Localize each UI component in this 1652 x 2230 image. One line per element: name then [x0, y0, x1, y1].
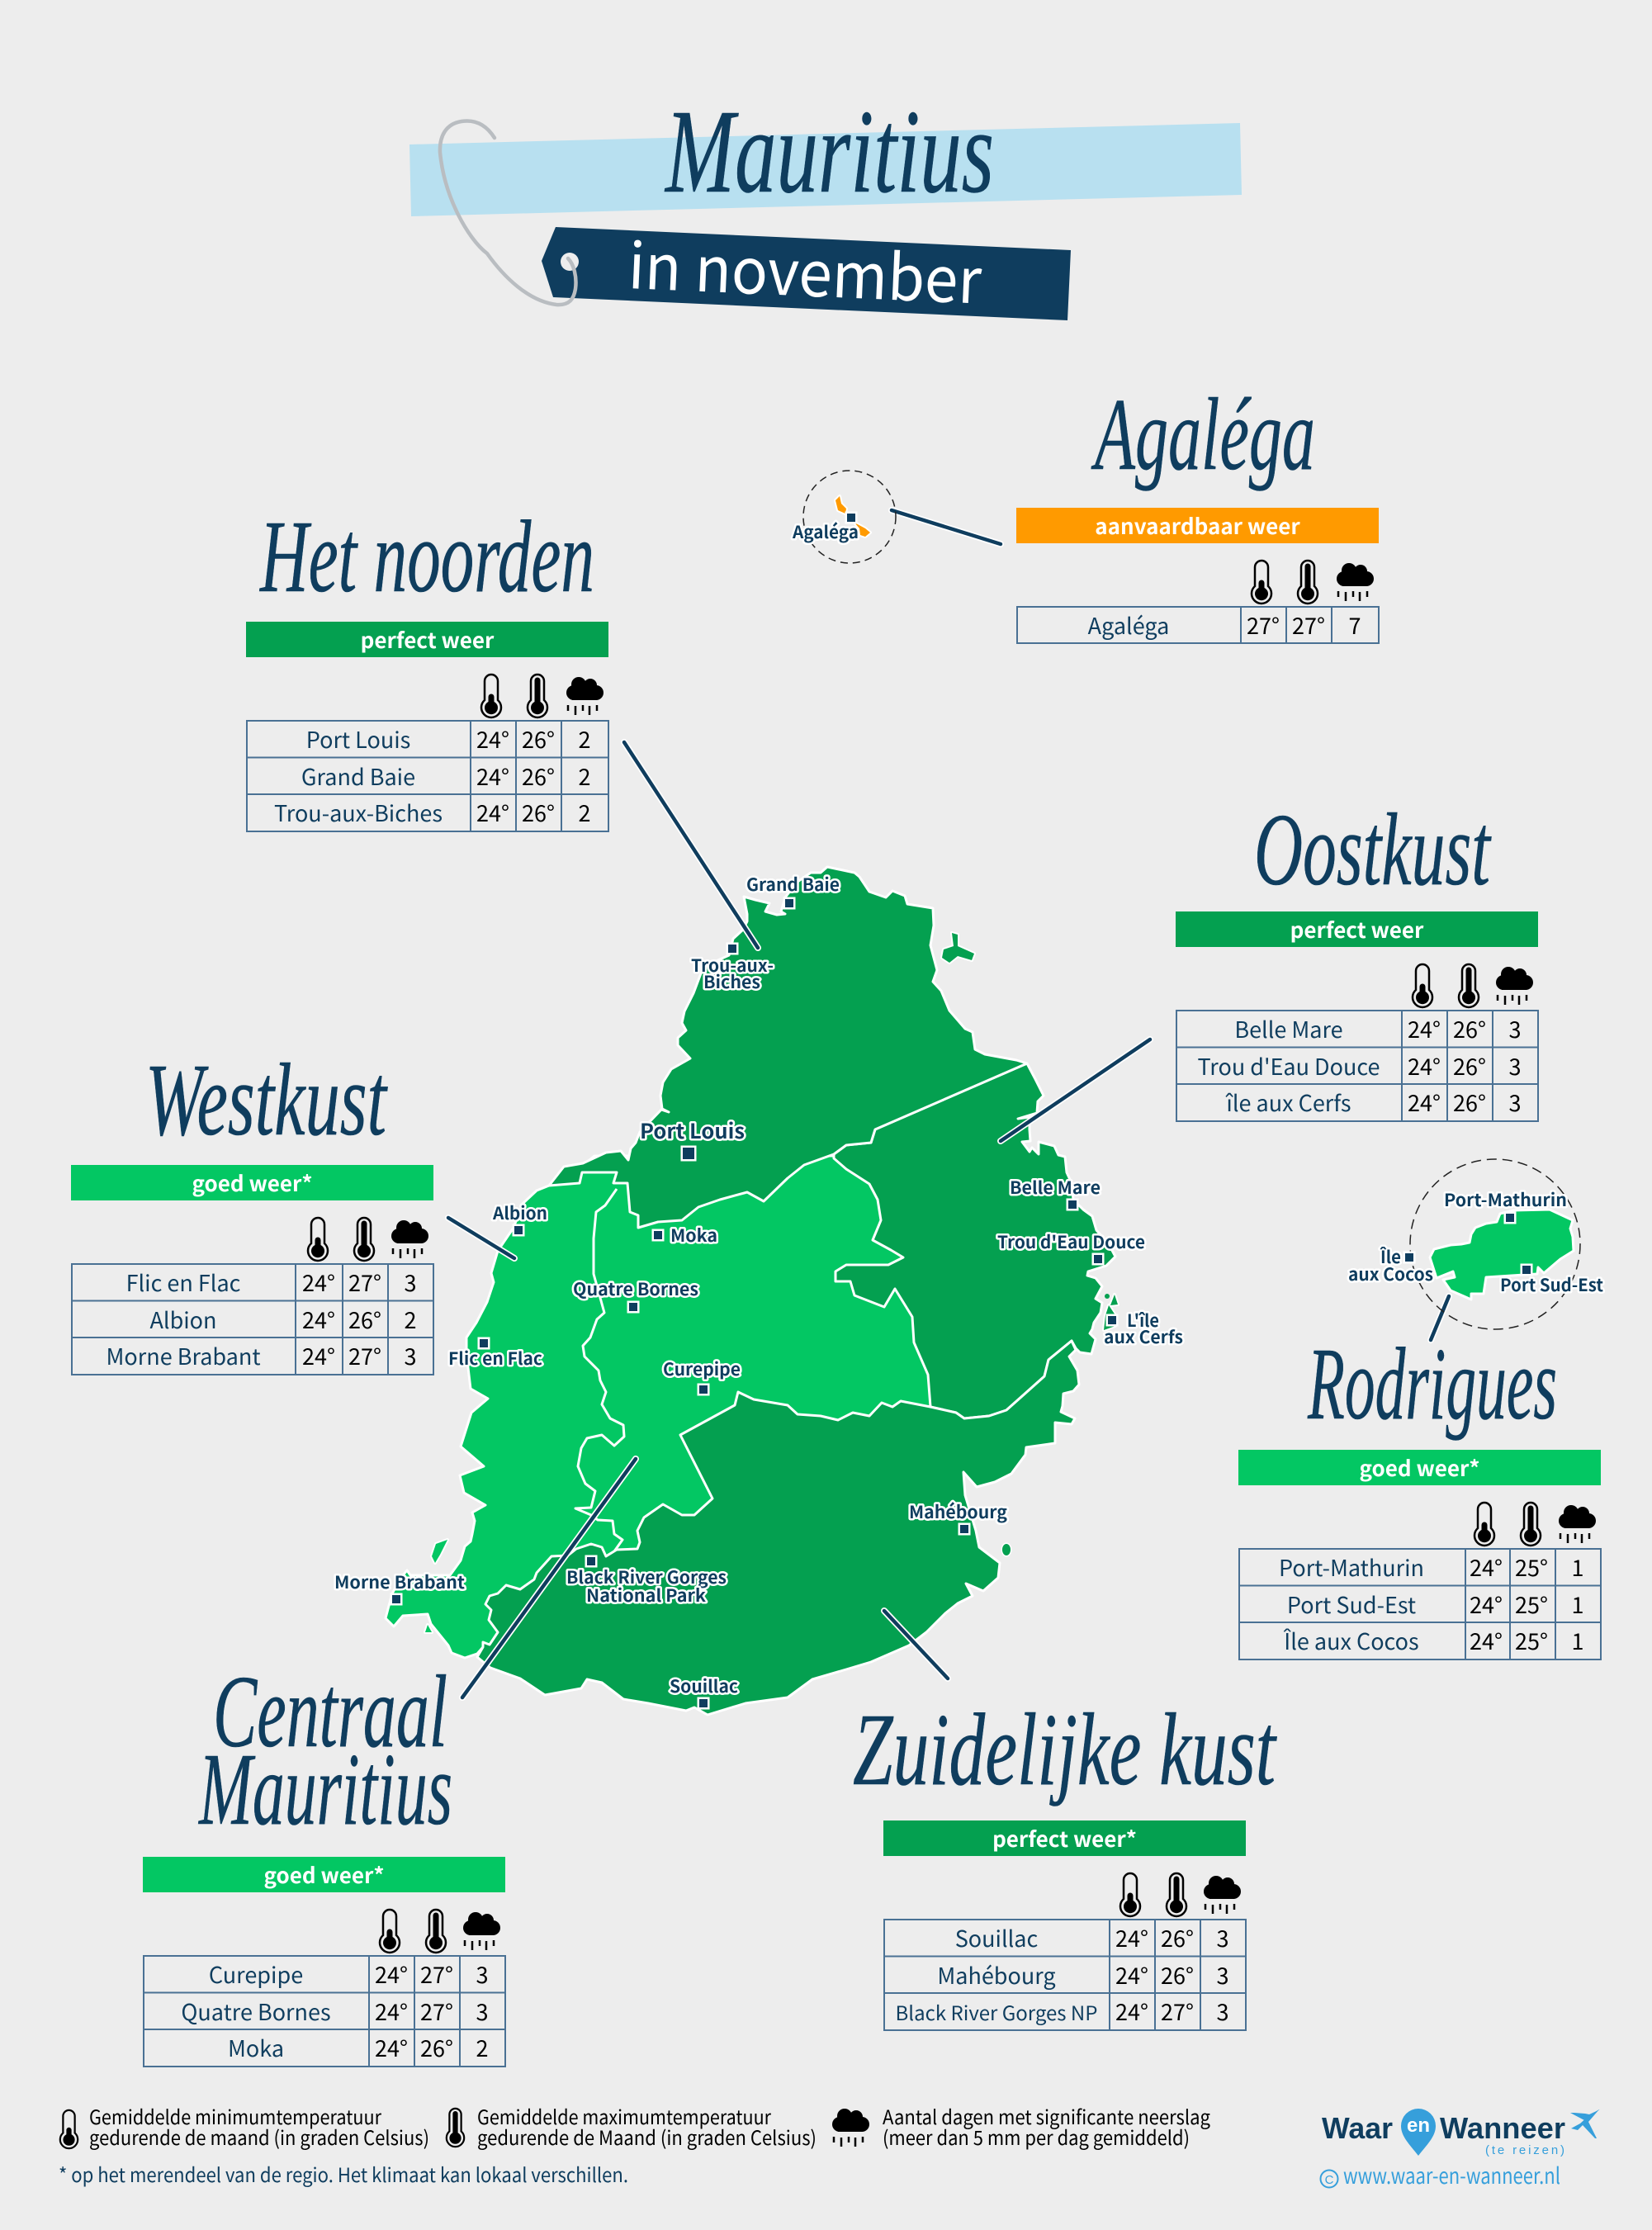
legend: rain days [832, 2101, 1210, 2151]
rating and table: 2 [578, 760, 591, 792]
rating and table: Agaléga [1088, 608, 1169, 641]
rating and table: 24° [302, 1303, 335, 1335]
rating and table [883, 1820, 1246, 2030]
heading line 1: Centraal [213, 1655, 447, 1769]
rating and table: 25° [1515, 1588, 1548, 1620]
map labels and markers: main island: Mahébourg [909, 1499, 1007, 1524]
labels and markers: Port Sud-Est [1500, 1272, 1603, 1297]
rating and table: 3 [1217, 1921, 1228, 1953]
panel: Oostkust [1176, 793, 1538, 1121]
map labels and markers: main island: Trou-aux- [691, 953, 774, 978]
rating and table: Grand Baie [301, 760, 415, 792]
rating and table: 3 [1509, 1012, 1521, 1044]
rating and table: 24° [1470, 1588, 1503, 1620]
region: west and central [386, 1156, 991, 1658]
map labels and markers: main island: Albion [492, 1200, 547, 1225]
rating and table: 24° [375, 1958, 408, 1990]
islands [835, 496, 870, 537]
logo: Waar en Wanneer [1321, 2109, 1600, 2190]
rating and table: perfect weer* [992, 1823, 1137, 1854]
rating and table: 26° [1453, 1012, 1486, 1044]
panel: Rodrigues [1238, 1328, 1601, 1659]
map labels and markers: main island: Belle Mare [1010, 1175, 1101, 1200]
rating and table: Morne Brabant [106, 1339, 261, 1371]
callout lines [448, 510, 1449, 1697]
rating and table: île aux Cerfs [1225, 1086, 1351, 1118]
line: westkust [448, 1218, 514, 1258]
rating and table: 27° [1247, 608, 1280, 641]
heading: Het noorden [259, 500, 594, 614]
icon: plane [1570, 2109, 1600, 2138]
rating and table: 27° [1292, 608, 1325, 641]
tag hole [561, 253, 579, 271]
heading: Oostkust [1254, 793, 1492, 907]
panel: Het noorden [246, 500, 608, 831]
heading line 2: Mauritius [198, 1733, 452, 1847]
rating and table: Curepipe [209, 1958, 303, 1990]
rating and table: 24° [1115, 1995, 1148, 2027]
labels and markers: Île [1380, 1244, 1401, 1269]
copyright and url: www.waar-en-wanneer.nl [1343, 2158, 1560, 2190]
rating and table: 1 [1572, 1624, 1583, 1656]
rating and table: 27° [420, 1958, 453, 1990]
panel: Zuidelijke kust [853, 1693, 1277, 2030]
line: rodrigues [1431, 1296, 1449, 1340]
rating and table: 7 [1349, 608, 1361, 641]
rating and table: 3 [476, 1995, 489, 2027]
rating and table: 24° [1470, 1624, 1503, 1656]
map: Rodrigues inset [1348, 1159, 1603, 1329]
map labels and markers: main island: Trou d'Eau Douce [997, 1229, 1145, 1254]
rating and table: 3 [476, 1958, 489, 1990]
tag ring [440, 121, 576, 305]
map labels and markers: main island [334, 872, 1183, 1707]
rating and table: Port Louis [306, 722, 410, 755]
legend: minimum temperature: Gemiddelde minimumtemperatuur [89, 2101, 382, 2130]
tagline: (te reizen) [1485, 2143, 1564, 2157]
rating and table: 24° [375, 2031, 408, 2063]
legend: rain days: (meer dan 5 mm per dag gemiddeld) [883, 2122, 1190, 2151]
rating and table: 24° [476, 760, 509, 792]
legend: minimum temperature [60, 2101, 429, 2151]
rating and table: 26° [1161, 1958, 1194, 1991]
region: north [549, 867, 1027, 1228]
title band [409, 123, 1242, 216]
rating and table: goed weer* [192, 1167, 313, 1198]
rating and table: aanvaardbaar weer [1095, 510, 1300, 541]
rating and table: 25° [1515, 1551, 1548, 1583]
boundary west-central [575, 1189, 624, 1556]
legend [60, 2101, 1210, 2151]
map labels and markers: main island: L'île [1127, 1308, 1159, 1333]
rating and table: 24° [476, 796, 509, 828]
map labels and markers: main island: Grand Baie [746, 872, 840, 897]
west small islands [425, 1540, 447, 1632]
rating and table [71, 1165, 433, 1375]
copyright and url: C [1325, 2173, 1334, 2187]
rating and table: 3 [405, 1266, 416, 1298]
legend: maximum temperature: gedurende de Maand (in graden Celsius) [477, 2122, 817, 2151]
islands: dark green [942, 933, 1118, 1330]
map labels and markers: main island: National Park [586, 1583, 706, 1607]
region: south coast [477, 1341, 1079, 1715]
rating and table: 24° [302, 1339, 335, 1371]
rating and table: Port Sud-Est [1287, 1588, 1416, 1620]
rating and table [1176, 911, 1538, 1121]
map labels and markers: main island: Biches [703, 969, 760, 994]
line: agalega [892, 510, 1001, 544]
legend: rain days: Aantal dagen met significante neerslag [883, 2101, 1210, 2130]
rating and table: 26° [1453, 1049, 1486, 1082]
map labels and markers: main island: aux Cerfs [1104, 1324, 1183, 1349]
rating and table: Quatre Bornes [181, 1995, 331, 2027]
rating and table: 24° [1408, 1049, 1441, 1082]
rating and table: 26° [522, 760, 555, 792]
rating and table: 3 [1217, 1995, 1228, 2027]
rating and table: 2 [578, 722, 591, 755]
line: zuidelijke kust [884, 1611, 948, 1678]
rating and table [246, 622, 608, 831]
subtitle tag [542, 227, 1071, 320]
rating and table: 27° [348, 1339, 381, 1371]
rating and table: 2 [578, 796, 591, 828]
rating and table: perfect weer [361, 624, 495, 655]
rating and table: 26° [348, 1303, 381, 1335]
panel: Westkust [71, 1044, 433, 1375]
rating and table: 3 [1509, 1086, 1521, 1118]
rating and table: 26° [522, 722, 555, 755]
islet east [1105, 1294, 1110, 1299]
rating and table: 27° [348, 1266, 381, 1298]
rating and table [1238, 1450, 1601, 1659]
rating and table: Trou-aux-Biches [274, 796, 443, 828]
islet south-east [1002, 1544, 1011, 1555]
panel: Agalega [1016, 378, 1379, 643]
legend: maximum temperature [447, 2101, 817, 2151]
rating and table: 24° [1115, 1921, 1148, 1953]
map labels and markers: main island: Quatre Bornes [573, 1276, 698, 1301]
rating and table: 2 [405, 1303, 416, 1335]
heading: Westkust [145, 1044, 388, 1158]
rating and table: goed weer* [1359, 1452, 1480, 1483]
dashed circle [803, 471, 896, 563]
line: centraal [462, 1459, 636, 1697]
title: Mauritius: Mauritius [665, 86, 994, 218]
rating and table: Moka [228, 2031, 284, 2063]
icon: map pin [1401, 2109, 1436, 2156]
rating and table: Mahébourg [937, 1958, 1056, 1991]
rating and table: 1 [1572, 1551, 1583, 1583]
region: east coast [834, 1063, 1115, 1418]
rating and table: 26° [1453, 1086, 1486, 1118]
rating and table: Souillac [955, 1921, 1038, 1953]
map: Agalega inset [792, 471, 896, 563]
labels and markers [1348, 1187, 1603, 1297]
rating and table: 26° [522, 796, 555, 828]
rating and table: 3 [1217, 1958, 1228, 1991]
rating and table: perfect weer [1290, 914, 1424, 945]
rating and table [1016, 508, 1379, 643]
map labels and markers: main island: Moka [670, 1223, 717, 1248]
rating and table: 2 [476, 2031, 489, 2063]
rating and table: 24° [1408, 1012, 1441, 1044]
rating and table: Albion [149, 1303, 217, 1335]
rating and table: 24° [476, 722, 509, 755]
rating and table: 25° [1515, 1624, 1548, 1656]
rating and table [143, 1857, 505, 2067]
rating and table: 3 [1509, 1049, 1521, 1082]
labels and markers: aux Cocos [1348, 1262, 1433, 1286]
rating and table: 24° [302, 1266, 335, 1298]
map labels and markers: main island: Curepipe [663, 1356, 741, 1381]
rating and table: 24° [1408, 1086, 1441, 1118]
map labels and markers: main island: Morne Brabant [334, 1570, 465, 1594]
rating and table: Black River Gorges NP [896, 1997, 1097, 2026]
map labels and markers: main island: Port Louis [640, 1115, 745, 1145]
rating and table: 26° [1161, 1921, 1194, 1953]
line: noorden [624, 742, 758, 948]
pin text: en [1407, 2114, 1430, 2137]
map labels and markers: main island: Black River Gorges [566, 1565, 727, 1589]
rating and table: 27° [420, 1995, 453, 2027]
rating and table: Flic en Flac [126, 1266, 240, 1298]
rating and table: 3 [405, 1339, 416, 1371]
rating and table: 26° [420, 2031, 453, 2063]
rating and table: 24° [1470, 1551, 1503, 1583]
map: Mauritius main island [386, 867, 1118, 1715]
rating and table: Trou d'Eau Douce [1198, 1049, 1380, 1082]
legend: maximum temperature: Gemiddelde maximumtemperatuur [477, 2101, 772, 2130]
logo text left: Waar [1322, 2111, 1393, 2145]
island [1430, 1210, 1574, 1300]
rating and table: 27° [1161, 1995, 1194, 2027]
rating and table: Port-Mathurin [1279, 1551, 1424, 1583]
marker [847, 514, 855, 522]
dashed circle [1410, 1159, 1580, 1329]
rating and table: 1 [1572, 1588, 1583, 1620]
rating and table: Belle Mare [1234, 1012, 1343, 1044]
map labels and markers: main island: Souillac [670, 1674, 738, 1698]
subtitle: in november: in november [627, 215, 984, 322]
legend: minimum temperature: gedurende de maand (in graden Celsius) [89, 2122, 429, 2151]
label: Agaléga [792, 519, 859, 544]
line: oostkust [1001, 1039, 1150, 1141]
rating and table: 24° [1115, 1958, 1148, 1991]
rating and table: 24° [375, 1995, 408, 2027]
title block [409, 86, 1242, 322]
rating and table: goed weer* [263, 1859, 385, 1890]
panel: Centraal Mauritius [143, 1655, 505, 2067]
footnote: * op het merendeel van de regio. Het klimaat kan lokaal verschillen. [59, 2159, 628, 2188]
heading: Agaléga [1091, 378, 1315, 492]
heading: Zuidelijke kust [853, 1693, 1277, 1807]
labels and markers: Port-Mathurin [1444, 1187, 1567, 1212]
map labels and markers: main island: Flic en Flac [448, 1346, 542, 1371]
rating and table: Île aux Cocos [1283, 1624, 1419, 1656]
logo text right: Wanneer [1440, 2111, 1565, 2145]
